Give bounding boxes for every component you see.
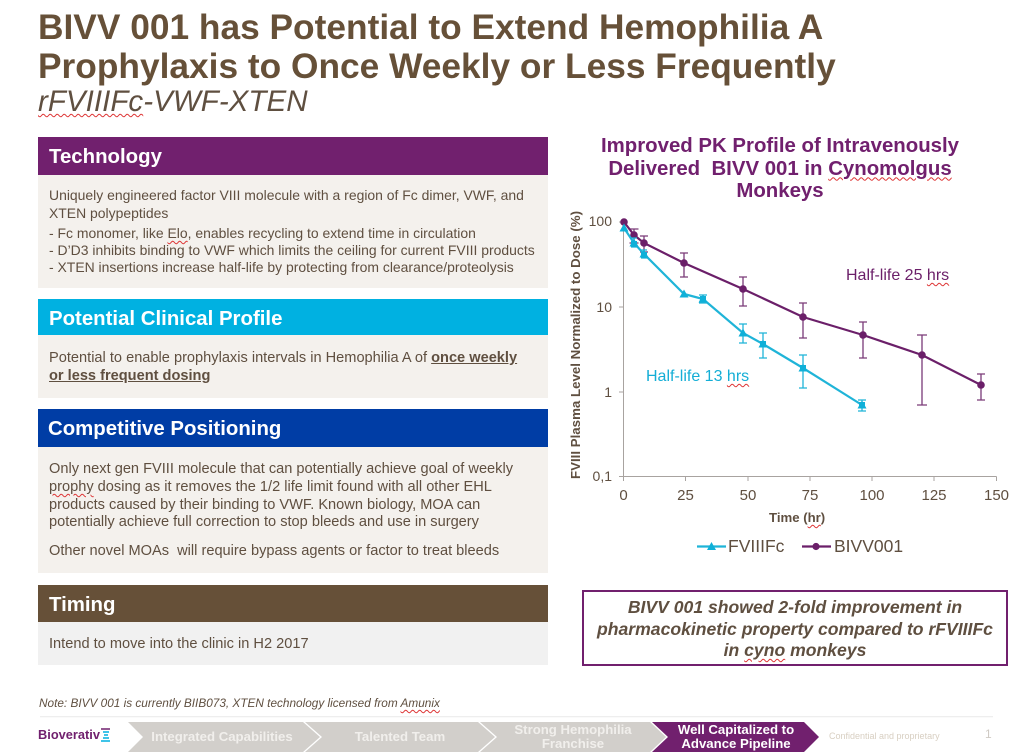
heading: timing: Timing [49,594,115,616]
x axis tick labels: 50 [740,487,756,504]
confidentiality label: Confidential and proprietary [829,731,940,741]
text block: technology [38,175,548,288]
nav step: well capitalized to advance pipeline: Advance Pipeline [681,736,791,751]
callout: pharmacokinetic property compared to rFVIIIFc [597,618,993,638]
series: FVIIIFc [620,224,866,411]
legend: BIVV001 [834,536,903,556]
x axis tick labels: 0 [619,487,628,504]
y axis tick labels: 10 [596,299,612,315]
text block: competitive positioning: products caused by their binding to VWF. Known biology, MOA can [49,497,480,513]
legend: FVIIIFc [728,536,785,556]
text block: clinical profile: Potential to enable prophylaxis intervals in Hemophilia A of once weekly [49,350,517,366]
nav step: strong hemophilia franchise: Franchise [542,736,604,751]
nav step: well capitalized to advance pipeline: Well Capitalized to [678,722,794,737]
y axis tick labels: 100 [589,213,612,229]
text block: technology: - Fc monomer, like Elo, enables recycling to extend time in circulation [49,225,476,241]
nav step: integrated capabilities: Integrated Capabilities [151,729,293,744]
y axis title: FVIII Plasma Level Normalized to Dose (%) [569,211,583,479]
text block: competitive positioning [38,447,548,573]
axes [619,222,996,481]
x axis tick labels: 75 [802,487,818,504]
chart title: Delivered BIVV 001 in Cynomolgus [608,158,952,180]
heading: technology: Technology [49,146,162,168]
heading: competitive positioning [38,409,548,447]
chart title: Monkeys [736,180,824,202]
panel: technology [38,137,548,288]
y axis tick labels: 1 [604,384,612,400]
text block: technology: - XTEN insertions increase half-life by protecting from clearance/proteolysis [49,259,514,275]
panel: competitive positioning [38,409,548,573]
x axis title: Time (hr) [769,510,825,525]
label: half-life 25 hrs: Half-life 25 hrs [846,267,949,284]
title [38,8,836,118]
nav step: strong hemophilia franchise: Strong Hemophilia [514,722,632,737]
heading: timing [38,585,548,622]
x axis tick labels [619,487,1009,504]
heading: potential clinical profile [38,299,548,335]
nav step: strong hemophilia franchise [480,722,666,752]
title: Prophylaxis to Once Weekly or Less Frequently [38,47,836,86]
x axis tick labels: 100 [859,487,885,504]
text block: technology: Uniquely engineered factor VIII molecule with a region of Fc dimer, VWF, and [49,187,524,203]
text block: competitive positioning: Only next gen FVIII molecule that can potentially achieve goal of weekly [49,461,513,477]
nav step: talented team: Talented Team [355,729,445,744]
chart title [601,135,959,202]
x axis tick labels: 150 [984,487,1009,504]
chart title: Improved PK Profile of Intravenously [601,135,959,157]
x axis tick labels: 25 [677,487,694,504]
callout: BIVV 001 showed 2-fold improvement in [628,597,962,617]
text block: clinical profile [38,335,548,398]
nav step: well capitalized to advance pipeline [652,722,819,752]
text block: competitive positioning: prophy dosing as it removes the 1/2 life limit found with all other EHL [49,479,492,495]
footer navigation [38,716,993,752]
text block: timing: Intend to move into the clinic in H2 2017 [49,636,309,652]
label: half-life 13 hrs: Half-life 13 hrs [646,368,749,385]
heading: competitive positioning: Competitive Positioning [48,418,281,440]
x axis tick labels: 125 [921,487,947,504]
text block: competitive positioning: Other novel MOAs will require bypass agents or factor to treat bleeds [49,543,499,559]
heading: potential clinical profile: Potential Clinical Profile [49,308,282,330]
heading: technology [38,137,548,175]
callout [582,590,1008,666]
text block: competitive positioning: potentially achieve full correction to stop bleeds and use in surgery [49,514,479,530]
title: BIVV 001 has Potential to Extend Hemophilia A [38,8,823,47]
callout: in cyno monkeys [724,640,866,660]
subtitle: rFVIIIFc-VWF-XTEN [38,85,308,118]
text block: clinical profile: or less frequent dosing [49,368,210,384]
footnote: Note: BIVV 001 is currently BIIB073, XTEN technology licensed from Amunix [39,696,440,710]
text block: timing [38,622,548,665]
text block: technology: XTEN polypeptides [49,204,168,220]
panel: potential clinical profile [38,299,548,398]
logo: Bioverativ: Bioverativ [38,727,101,742]
legend [697,536,903,556]
text block: technology: - D’D3 inhibits binding to VWF which limits the ceiling for current FVIII products [49,242,535,258]
nav step: talented team [305,722,495,752]
nav step: integrated capabilities [128,722,320,752]
panel: timing [38,585,548,665]
page number: 1 [985,727,992,741]
y axis tick labels [589,213,612,484]
y axis tick labels: 0,1 [593,468,612,484]
series: BIVV001 [620,218,985,405]
